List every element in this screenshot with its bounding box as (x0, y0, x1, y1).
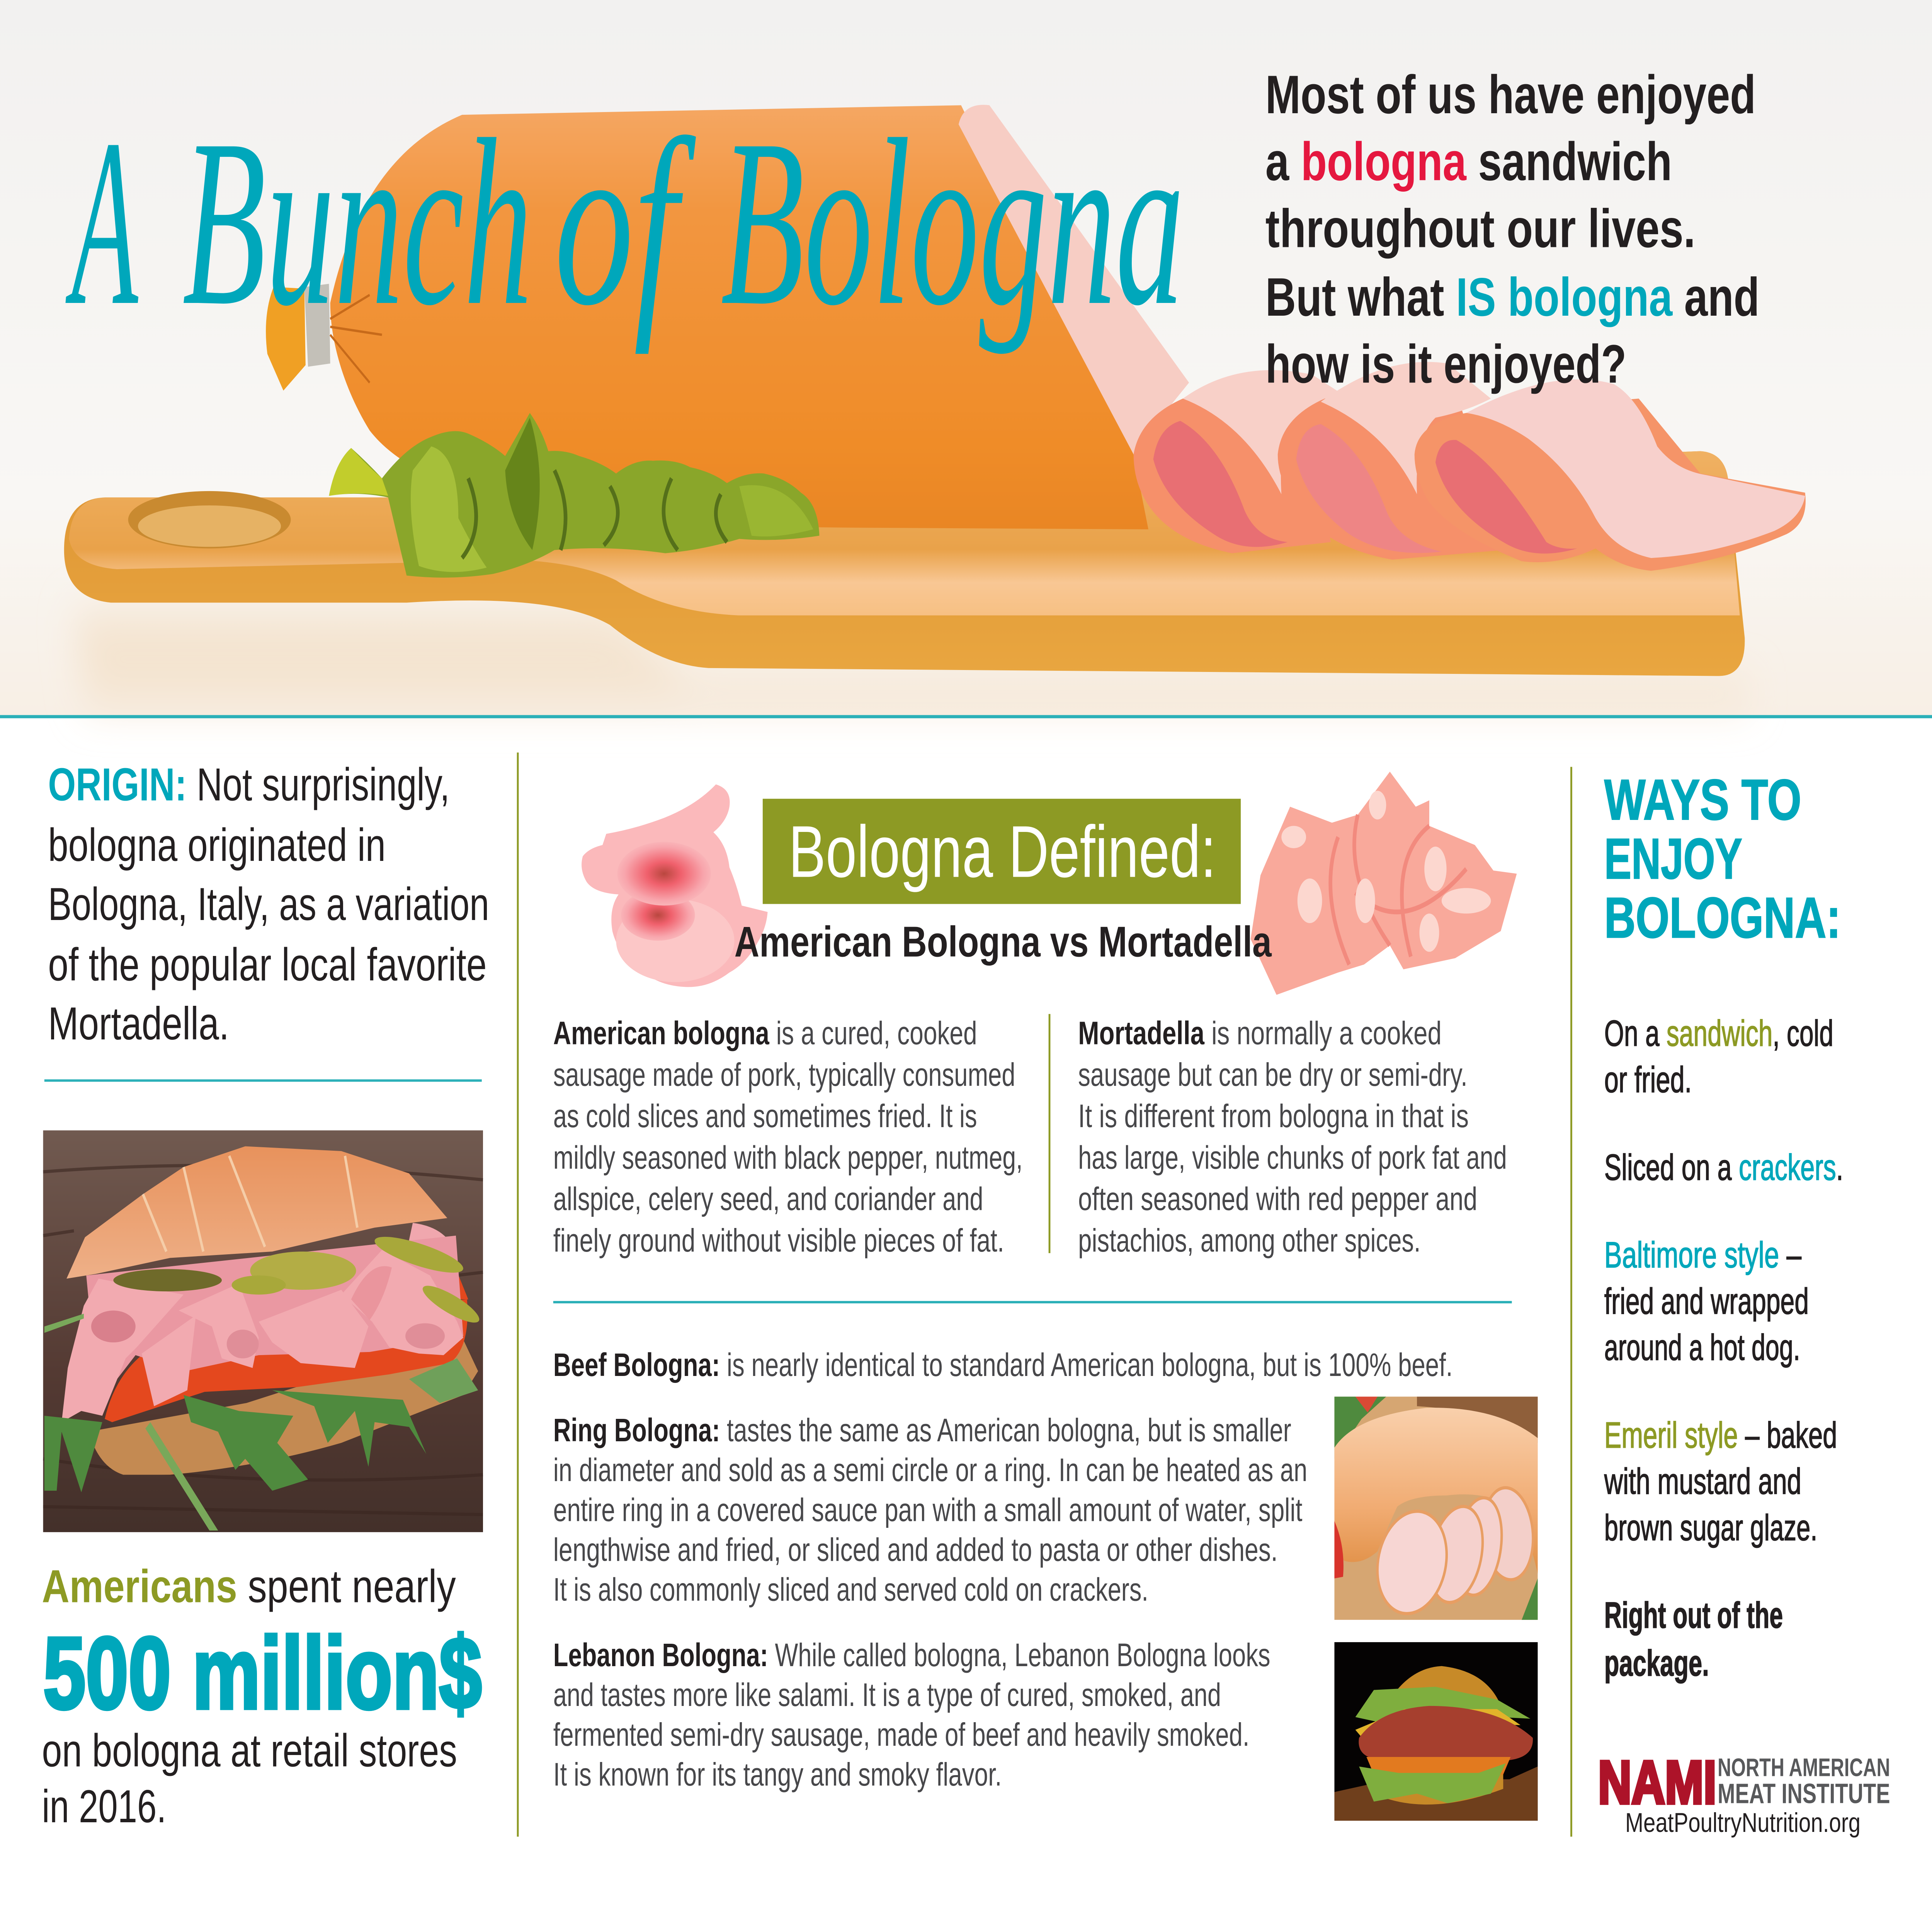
origin text: Bologna, Italy, as a variation (48, 878, 489, 930)
text: mortadella (1078, 1015, 1507, 1259)
title (65, 90, 1184, 355)
photo: mortadella slices (1251, 772, 1517, 995)
statistic: Americans spent nearly (42, 1560, 456, 1612)
intro text: Most of us have enjoyed (1265, 65, 1756, 125)
hero background (0, 0, 1932, 716)
heading: BOLOGNA: (1604, 886, 1841, 950)
text: lebanon bologna: fermented semi-dry sausage, made of beef and heavily smoked. (553, 1717, 1249, 1753)
logo: NAMI (1598, 1748, 1890, 1838)
origin text: of the popular local favorite (48, 939, 487, 990)
text: american bologna: American bologna is a cured, cooked (553, 1015, 977, 1052)
text: american bologna (553, 1015, 1023, 1259)
origin text: bologna originated in (48, 819, 386, 871)
title: of (554, 90, 698, 355)
list of serving ideas: On a sandwich, cold (1604, 1013, 1833, 1054)
list of serving ideas: Sliced on a crackers. (1604, 1146, 1843, 1187)
list of serving ideas: with mustard and (1604, 1461, 1801, 1502)
divider line (0, 715, 1932, 718)
panel: ways to enjoy (1598, 768, 1890, 1838)
list of serving ideas: around a hot dog. (1604, 1327, 1800, 1368)
list of serving ideas: package. (1604, 1642, 1709, 1684)
photo: lebanon bologna burger (1334, 1642, 1538, 1821)
intro text (1265, 65, 1760, 394)
photo: american bologna slices (582, 784, 768, 987)
logo: NAMI: NORTH AMERICAN (1718, 1753, 1890, 1782)
text: ring bologna: in diameter and sold as a semi circle or a ring. In can be heated as an (553, 1452, 1307, 1488)
intro text: But what IS bologna and (1265, 267, 1760, 327)
text: mortadella: sausage but can be dry or semi-dry. (1078, 1057, 1468, 1093)
heading (1604, 768, 1841, 950)
text: mortadella: often seasoned with red pepper and (1078, 1181, 1477, 1218)
text: lebanon bologna: It is known for its tangy and smoky flavor. (553, 1757, 1002, 1793)
text: american bologna: as cold slices and sometimes fried. It is (553, 1098, 977, 1134)
text: american bologna: allspice, celery seed, and coriander and (553, 1181, 983, 1218)
heading: ENJOY (1604, 827, 1742, 891)
intro text: throughout our lives. (1265, 198, 1696, 259)
text: american bologna: sausage made of pork, typically consumed (553, 1057, 1015, 1093)
subheading: American Bologna vs Mortadella (735, 918, 1272, 966)
text: ring bologna: Ring Bologna: tastes the same as American bologna, but is smaller (553, 1412, 1291, 1449)
intro text: how is it enjoyed? (1265, 334, 1626, 394)
photo: cutting board (64, 451, 1745, 676)
text: beef bologna: Beef Bologna: is nearly identical to standard American bologna, but is 100% beef. (553, 1347, 1453, 1383)
intro text: a bologna sandwich (1265, 131, 1672, 192)
photo: bologna sandwich (43, 1130, 483, 1532)
text: american bologna: mildly seasoned with black pepper, nutmeg, (553, 1139, 1023, 1176)
origin text: Mortadella. (48, 998, 229, 1049)
text: mortadella: pistachios, among other spices. (1078, 1223, 1421, 1259)
panel: hero banner (0, 0, 1932, 716)
photo: sliced bologna (1134, 362, 1806, 571)
statistic (42, 1560, 482, 1832)
panel: origin column (42, 759, 489, 1832)
title: Bologna (721, 90, 1184, 355)
list of serving ideas: Right out of the (1604, 1595, 1783, 1636)
text: mortadella: Mortadella is normally a cooked (1078, 1015, 1442, 1052)
panel: bologna defined (553, 772, 1538, 1821)
photo: lettuce (329, 413, 820, 578)
logo: NAMI: MeatPoultryNutrition.org (1625, 1808, 1861, 1838)
list of serving ideas: or fried. (1604, 1059, 1692, 1100)
text: lebanon bologna: and tastes more like salami. It is a type of cured, smoked, and (553, 1677, 1221, 1713)
photo: sausage (266, 105, 1189, 529)
list of serving ideas: fried and wrapped (1604, 1281, 1809, 1321)
list of serving ideas (1604, 1013, 1843, 1684)
board shadow (74, 614, 1750, 705)
text: ring bologna: entire ring in a covered sauce pan with a small amount of water, split (553, 1492, 1303, 1528)
statistic: in 2016. (42, 1781, 166, 1832)
photo: ring bologna (1334, 1396, 1538, 1628)
origin text (48, 759, 489, 1049)
text: lebanon bologna (553, 1637, 1270, 1793)
text: mortadella: It is different from bologna in that is (1078, 1098, 1469, 1134)
statistic: on bologna at retail stores (42, 1725, 457, 1776)
text: ring bologna (553, 1412, 1307, 1608)
list of serving ideas: Baltimore style – (1604, 1234, 1802, 1275)
text: lebanon bologna: Lebanon Bologna: While called bologna, Lebanon Bologna looks (553, 1637, 1270, 1673)
text: ring bologna: It is also commonly sliced and served cold on crackers. (553, 1572, 1148, 1608)
logo: NAMI: NAMI (1598, 1748, 1716, 1816)
heading: WAYS TO (1604, 768, 1801, 832)
statistic: 500 million$ (43, 1616, 482, 1730)
title: Bunch (182, 90, 532, 355)
text: american bologna: finely ground without visible pieces of fat. (553, 1223, 1004, 1259)
list of serving ideas: Emeril style – baked (1604, 1414, 1837, 1456)
origin text: ORIGIN: Not surprisingly, (48, 759, 450, 810)
title: A (65, 90, 139, 355)
text: ring bologna: lengthwise and fried, or sliced and added to pasta or other dishes. (553, 1532, 1278, 1568)
heading box: Bologna Defined: (789, 810, 1216, 893)
logo: NAMI: MEAT INSTITUTE (1718, 1778, 1890, 1809)
list of serving ideas: brown sugar glaze. (1604, 1507, 1817, 1548)
text: mortadella: has large, visible chunks of pork fat and (1078, 1139, 1507, 1176)
